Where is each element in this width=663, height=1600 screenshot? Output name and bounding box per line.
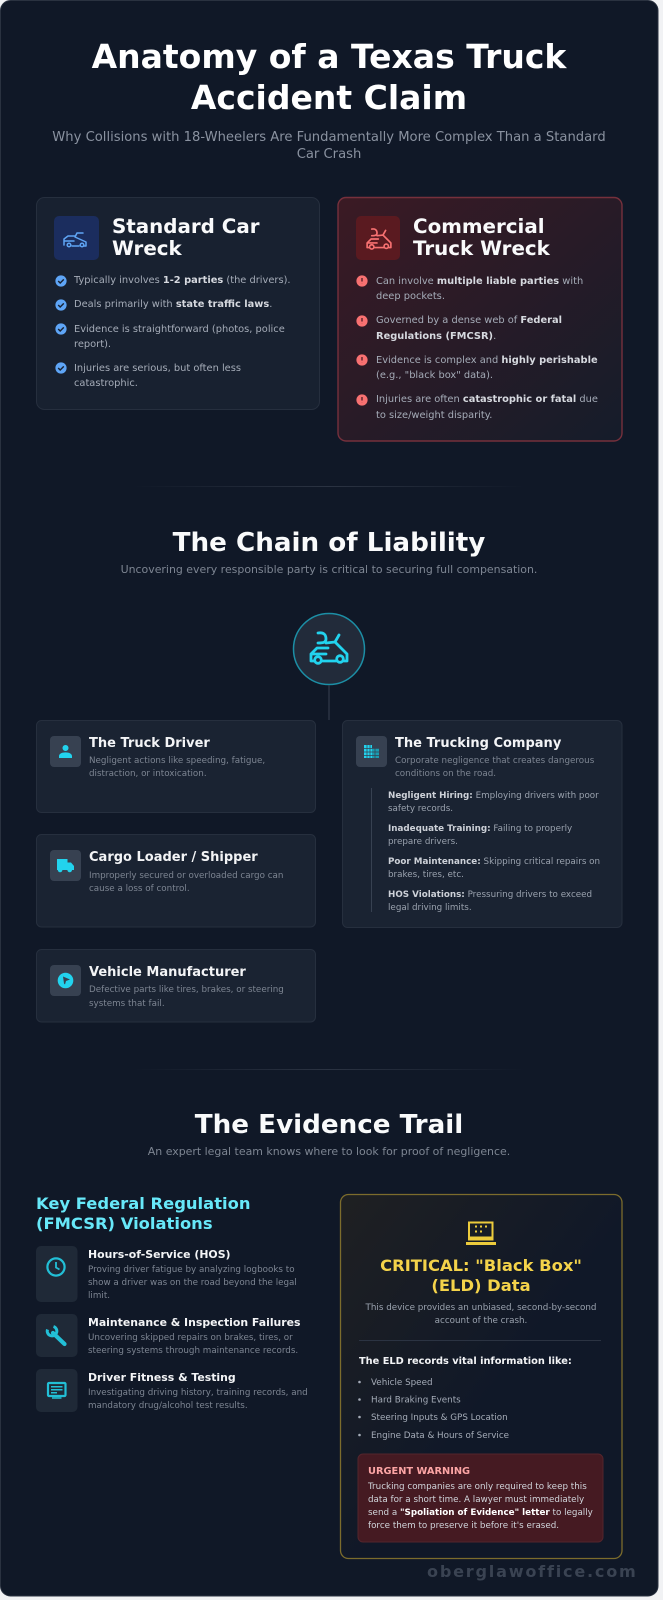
icon: delivery truck — [50, 850, 81, 881]
bullet list: deep pockets. — [376, 291, 445, 302]
eld data list: Engine Data & Hours of Service — [371, 1431, 509, 1441]
description: cause a loss of control. — [89, 884, 190, 894]
callout: urgent warning: "Spoliation of Evidence" letter to legally — [400, 1508, 593, 1518]
factor list: Negligent Hiring: Employing drivers with poor — [388, 791, 599, 801]
description: Improperly secured or overloaded cargo can — [89, 871, 283, 881]
icon: gear disc — [50, 965, 81, 996]
heading: Commercial — [413, 215, 545, 238]
subtitle: Why Collisions with 18-Wheelers Are Fundamentally More Complex Than a Standard — [52, 130, 606, 145]
factor list: safety records. — [388, 804, 453, 814]
title: Accident Claim — [191, 78, 467, 117]
description: systems that fail. — [89, 999, 165, 1009]
heading: Cargo Loader / Shipper — [89, 850, 258, 865]
panel: vehicle manufacturer — [36, 950, 316, 1022]
section subtitle: An expert legal team knows where to look for proof of negligence. — [148, 1145, 510, 1158]
factor list: Inadequate Training: Failing to properly — [388, 824, 572, 834]
description: show a driver was on the road beyond the legal — [88, 1278, 297, 1288]
bullet list: Governed by a dense web of Federal — [376, 315, 562, 326]
eld data list — [358, 1378, 509, 1441]
icon: truck crash — [356, 216, 400, 260]
heading: Standard Car — [112, 215, 260, 238]
description: Negligent actions like speeding, fatigue, — [89, 756, 265, 766]
callout: urgent warning: Trucking companies are only required to keep this — [368, 1482, 587, 1492]
description: limit. — [88, 1291, 110, 1301]
panel: cargo loader — [36, 834, 316, 927]
callout: urgent warning: data for a short time. A lawyer must immediately — [368, 1495, 584, 1505]
factor list: prepare drivers. — [388, 837, 458, 847]
title: Anatomy of a Texas Truck — [92, 37, 566, 76]
description: conditions on the road. — [395, 769, 496, 779]
item: maintenance and inspection failures — [36, 1314, 301, 1357]
eld data list: Hard Braking Events — [371, 1396, 461, 1406]
description: Defective parts like tires, brakes, or steering — [89, 985, 284, 995]
description: Investigating driving history, training records, and — [88, 1388, 308, 1398]
factor list — [388, 791, 600, 913]
bullet list: to size/weight disparity. — [376, 410, 492, 421]
description: Uncovering skipped repairs on brakes, tires, or — [88, 1333, 293, 1343]
eld data list: Vehicle Speed — [371, 1378, 433, 1388]
factor list: HOS Violations: Pressuring drivers to exceed — [388, 890, 592, 900]
icon: building — [356, 736, 387, 767]
factor list: Poor Maintenance: Skipping critical repairs on — [388, 857, 600, 867]
icon: clock — [36, 1246, 78, 1302]
heading: Driver Fitness & Testing — [88, 1371, 236, 1384]
section subtitle: Uncovering every responsible party is critical to securing full compensation. — [121, 563, 537, 576]
bullet list: report). — [74, 339, 111, 350]
description: account of the crash. — [435, 1316, 527, 1326]
description: mandatory drug/alcohol test results. — [88, 1401, 248, 1411]
heading: Maintenance & Inspection Failures — [88, 1316, 301, 1329]
item: driver fitness and testing — [36, 1369, 308, 1412]
heading: Truck Wreck — [413, 237, 551, 260]
heading: key federal regulation violations: Key Federal Regulation — [36, 1194, 250, 1213]
bullet list — [356, 275, 598, 421]
bullet list: . — [493, 331, 496, 342]
bullet list: Evidence is complex and highly perishable — [376, 355, 598, 366]
description: Corporate negligence that creates dangerous — [395, 756, 594, 766]
eld data list: Steering Inputs & GPS Location — [371, 1413, 508, 1423]
heading: The Truck Driver — [89, 736, 210, 751]
bullet list: catastrophic. — [74, 378, 138, 389]
bullet list: Evidence is straightforward (photos, police — [74, 324, 285, 335]
icon: wrench — [36, 1314, 78, 1357]
panel: commercial truck wreck — [338, 198, 622, 441]
heading: (ELD) Data — [431, 1276, 531, 1295]
bullet list: Injuries are often catastrophic or fatal due — [376, 394, 598, 405]
heading: The Trucking Company — [395, 736, 562, 751]
heading: Hours-of-Service (HOS) — [88, 1248, 231, 1261]
bullet list — [55, 275, 291, 389]
subheading: The ELD records vital information like: — [359, 1356, 572, 1367]
icon: car — [54, 216, 99, 260]
subtitle: Car Crash — [297, 147, 361, 162]
heading: key federal regulation violations: (FMCSR) Violations — [36, 1214, 213, 1233]
heading: CRITICAL: "Black Box" — [380, 1256, 582, 1275]
bullet list: Deals primarily with state traffic laws. — [74, 299, 272, 310]
item: hours of service — [36, 1246, 297, 1302]
icon: monitor list — [36, 1369, 78, 1412]
bullet list: (e.g., "black box" data). — [376, 370, 493, 381]
bullet list: Typically involves 1-2 parties (the drivers). — [73, 275, 291, 286]
icon: laptop — [466, 1222, 496, 1245]
bullet list: Can involve multiple liable parties with — [376, 276, 583, 287]
panel: standard car wreck — [36, 198, 320, 410]
panel: the truck driver — [36, 720, 316, 812]
icon: truck crash hub — [294, 614, 364, 684]
panel: black box eld data — [340, 1194, 622, 1558]
heading: Wreck — [112, 237, 183, 260]
watermark: oberglawoffice.com — [427, 1562, 638, 1581]
bullet list: Regulations (FMCSR) — [376, 331, 493, 342]
callout: urgent warning: force them to preserve it before it's erased. — [368, 1521, 559, 1531]
bullet list: Injuries are serious, but often less — [74, 363, 241, 374]
description: distraction, or intoxication. — [89, 769, 207, 779]
icon: person — [50, 736, 81, 767]
callout: urgent warning — [358, 1454, 603, 1542]
section heading: the evidence trail: The Evidence Trail — [195, 1110, 463, 1140]
factor list: brakes, tires, etc. — [388, 870, 464, 880]
heading: Vehicle Manufacturer — [89, 965, 246, 980]
description: Proving driver fatigue by analyzing logbooks to — [88, 1265, 295, 1275]
section heading: the chain of liability: The Chain of Liability — [173, 528, 485, 558]
description: steering systems through maintenance records. — [88, 1346, 298, 1356]
panel: the trucking company — [342, 720, 622, 928]
callout: urgent warning: send a — [368, 1508, 400, 1518]
callout: urgent warning: URGENT WARNING — [368, 1466, 470, 1477]
factor list: legal driving limits. — [388, 903, 472, 913]
description: This device provides an unbiased, second-by-second — [366, 1303, 596, 1313]
